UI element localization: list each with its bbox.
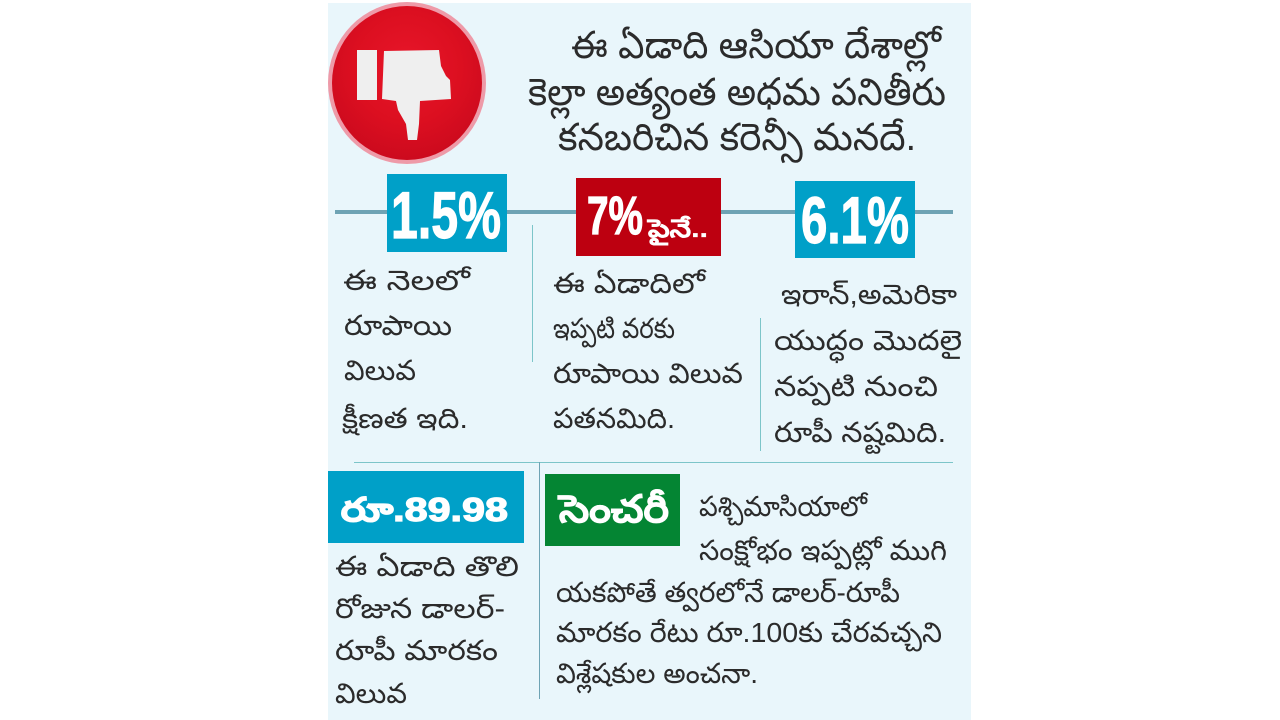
stat box: Rs 89.98 [328, 471, 524, 543]
text: this year's fall: రూపాయి విలువ [553, 358, 743, 389]
divider [532, 225, 533, 362]
text: since the war: ఇరాన్,అమెరికా [781, 279, 957, 310]
icon: thumbs down [328, 2, 486, 164]
text: this month's fall: ఈ నెలలో [343, 265, 473, 296]
text: this month's fall [342, 265, 473, 436]
divider [760, 318, 761, 451]
text: analysts' estimate [556, 491, 947, 694]
green box: century [545, 474, 680, 546]
text: this month's fall: క్షీణత ఇది. [342, 403, 468, 436]
text: analysts' estimate: సంక్షోభం ఇప్పట్లో ముగి [699, 535, 947, 571]
heading [528, 25, 946, 164]
timeline rule [335, 210, 953, 214]
stat box: Rs 89.98: రూ.89.98 [341, 491, 508, 528]
text: since the war: యుద్ధం మొదలై [774, 325, 962, 364]
heading: ఈ ఏడాది ఆసియా దేశాల్లో [571, 25, 944, 73]
heading: కనబరిచిన కరెన్సీ మనదే. [558, 117, 916, 164]
text: analysts' estimate: విశ్లేషకుల అంచనా. [556, 658, 758, 694]
green box: century: సెంచరీ [557, 489, 669, 531]
background panel [328, 3, 971, 720]
text: analysts' estimate: యకపోతే త్వరలోనే డాలర్-రూపీ [556, 577, 900, 612]
text: this year's fall: పతనమిది. [553, 403, 675, 434]
stat box: 6.1%: 6.1% [801, 183, 909, 257]
heading: కెల్లా అత్యంత అధమ పనితీరు [528, 72, 946, 120]
text: first day of year value [335, 551, 519, 709]
text: this year's fall [553, 268, 743, 434]
text: this year's fall: ఈ ఏడాదిలో [553, 268, 707, 299]
vertical divider [539, 462, 540, 699]
text: first day of year value: రూపీ మారకం [335, 635, 498, 666]
text: since the war [774, 279, 962, 454]
stat box: 7% and above: 7% [587, 186, 643, 246]
text: since the war: రూపీ నష్టమిది. [774, 417, 946, 454]
text: since the war: నప్పటి నుంచి [774, 371, 938, 406]
horizontal divider [354, 462, 953, 463]
text: this year's fall: ఇప్పటి వరకు [553, 313, 675, 348]
stat box: 7% and above: పైనే.. [647, 215, 708, 246]
stat box: 7% and above [576, 178, 721, 256]
text: analysts' estimate: పశ్చిమాసియాలో [699, 491, 869, 526]
text: first day of year value: రోజున డాలర్- [335, 593, 505, 624]
text: this month's fall: విలువ [344, 355, 416, 386]
text: first day of year value: ఈ ఏడాది తొలి [335, 551, 519, 582]
text: this month's fall: రూపాయి [344, 310, 452, 341]
text: first day of year value: విలువ [335, 678, 407, 709]
stat box: 1.5%: 1.5% [391, 178, 501, 252]
text: analysts' estimate: మారకం రేటు రూ.100కు చేరవచ్చని [556, 617, 942, 652]
